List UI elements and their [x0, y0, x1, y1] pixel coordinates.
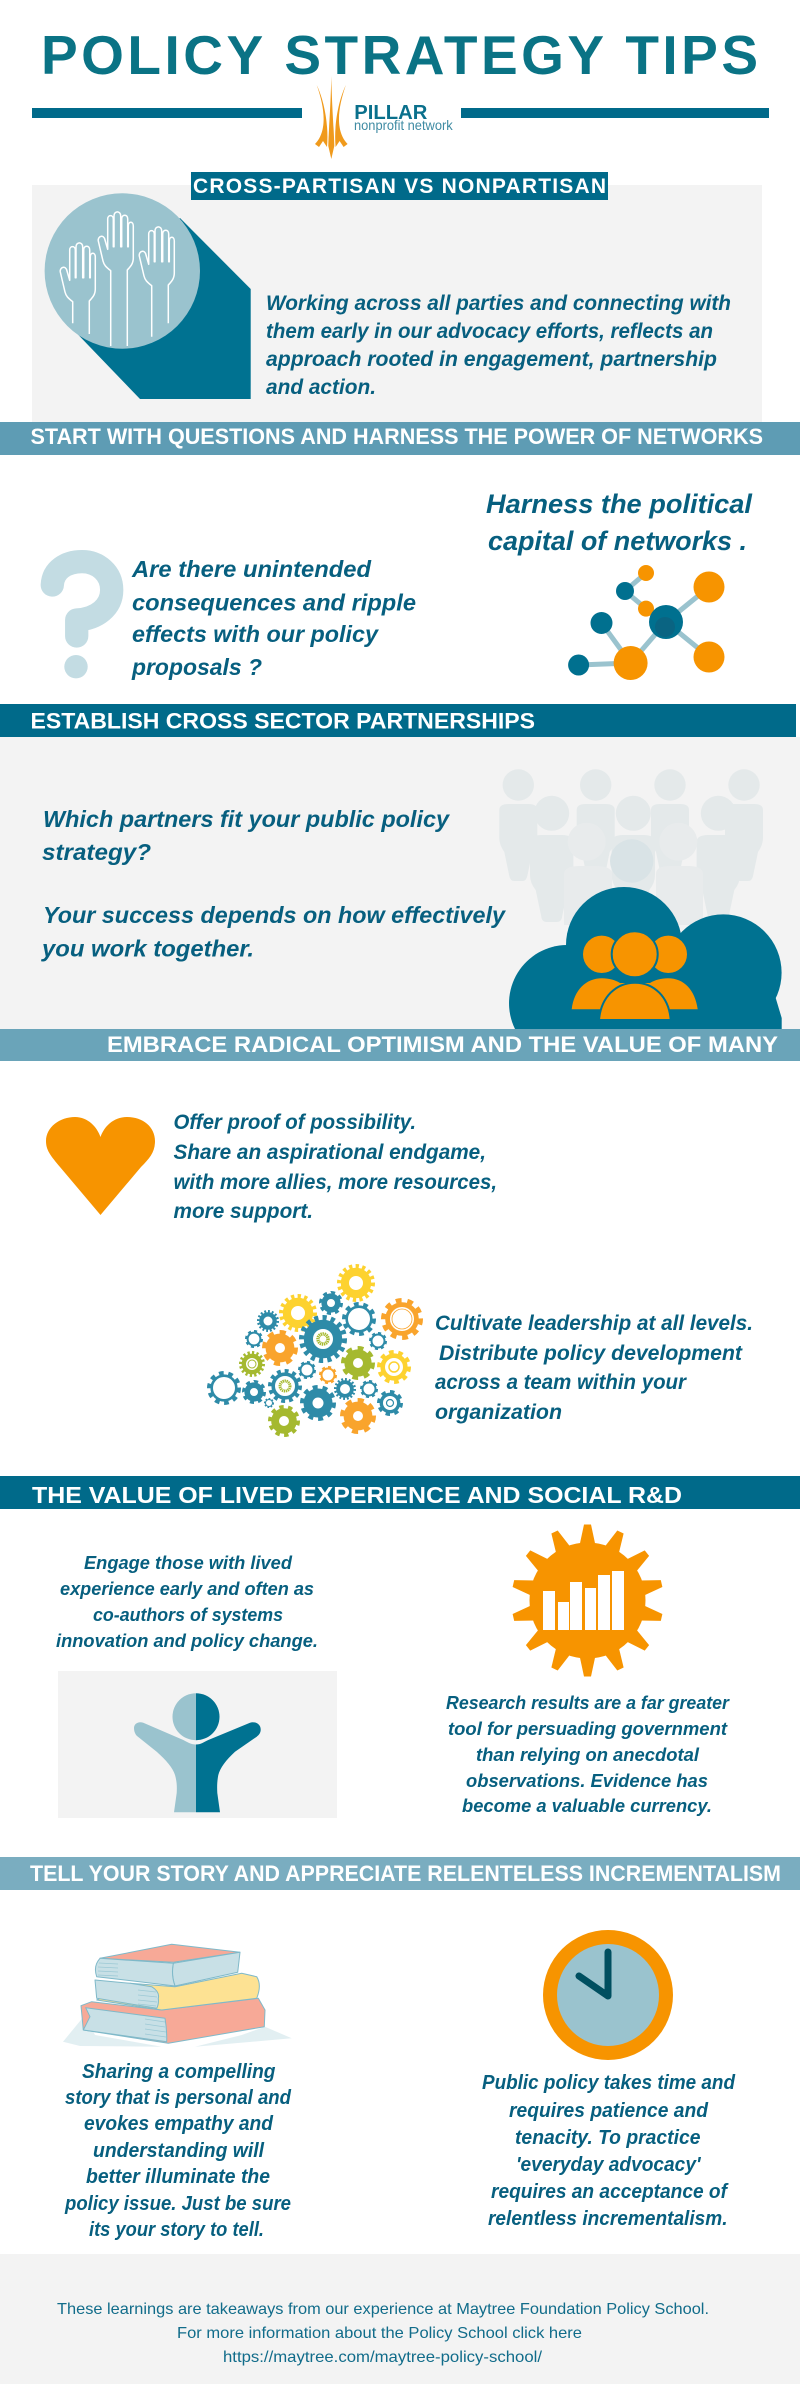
text: partners: [41, 806, 507, 962]
text: harness political capital: Harness the political: [486, 489, 752, 519]
text: unintended consequences: [131, 556, 416, 680]
section bar: cross sector partnerships: ESTABLISH CROSS SECTOR PARTNERSHIPS: [30, 708, 535, 733]
text: research results: become a valuable currency.: [462, 1795, 712, 1816]
text: harness political capital: [486, 489, 752, 556]
section bar: lived experience: THE VALUE OF LIVED EXPERIENCE AND SOCIAL R&D: [32, 1482, 682, 1508]
text: footer note: https://maytree.com/maytree-policy-school/: [223, 2349, 543, 2366]
text: research results: [446, 1692, 731, 1816]
text: proof of possibility: Offer proof of possibility.: [174, 1111, 416, 1134]
logo wordmark: nonprofit network: [354, 117, 454, 133]
logo flame: [315, 76, 348, 159]
text: partners: strategy?: [42, 839, 151, 865]
text: engage lived experience: co-authors of systems: [93, 1604, 283, 1625]
text: compelling story: story that is personal and: [65, 2087, 292, 2109]
text: cultivate leadership: organization: [435, 1401, 562, 1424]
text: proof of possibility: Share an aspirational endgame,: [174, 1141, 486, 1164]
section bar: cross sector partnerships: [0, 704, 796, 737]
text: unintended consequences: Are there unintended: [131, 556, 372, 582]
text: compelling story: policy issue. Just be sure: [64, 2193, 291, 2215]
text: cross-partisan body: and action.: [266, 376, 376, 399]
text: research results: tool for persuading government: [448, 1718, 728, 1739]
text: footer note: [57, 2301, 709, 2366]
text: footer note: These learnings are takeaways from our experience at Maytree Foundation Policy School.: [57, 2301, 709, 2318]
text: research results: than relying on anecdotal: [476, 1744, 700, 1765]
text: engage lived experience: experience early and often as: [60, 1578, 314, 1599]
text: compelling story: Sharing a compelling: [82, 2061, 276, 2083]
section bar: radical optimism: [0, 1029, 800, 1061]
icon: gear with bar chart: [512, 1524, 663, 1676]
text: partners: Which partners fit your public policy: [43, 806, 451, 832]
text: cross-partisan body: Working across all parties and connecting with: [266, 292, 731, 315]
text: research results: observations. Evidence has: [466, 1770, 708, 1791]
icon: clock: [543, 1930, 673, 2060]
text: unintended consequences: effects with our policy: [132, 621, 379, 647]
text: cross-partisan body: approach rooted in engagement, partnership: [266, 348, 717, 371]
section bar: lived experience: [0, 1476, 800, 1509]
text: cross-partisan body: [266, 292, 731, 399]
text: proof of possibility: [174, 1111, 497, 1223]
icon: raised hands: [45, 193, 251, 399]
text: compelling story: understanding will: [93, 2140, 264, 2162]
icon: two-tone person on grey panel: [58, 1671, 337, 1818]
text: public policy takes time: tenacity. To practice: [515, 2127, 700, 2149]
panel: cross sector partnerships: [0, 704, 800, 1031]
text: harness political capital: capital of networks .: [488, 526, 747, 556]
text: public policy takes time: 'everyday advocacy': [516, 2154, 702, 2176]
text: cross-partisan body: them early in our advocacy efforts, reflects an: [266, 320, 713, 343]
section bar: questions and networks: START WITH QUESTIONS AND HARNESS THE POWER OF NETWORKS: [30, 424, 763, 449]
panel: cross-partisan vs nonpartisan: [32, 172, 762, 422]
text: engage lived experience: innovation and policy change.: [56, 1630, 318, 1651]
text: cultivate leadership: [435, 1312, 753, 1424]
text: public policy takes time: Public policy takes time and: [482, 2072, 736, 2094]
icon: stack of books: [63, 1944, 292, 2047]
title rules and logo: [32, 76, 769, 159]
text: public policy takes time: relentless incrementalism.: [488, 2208, 728, 2230]
text: compelling story: evokes empathy and: [84, 2113, 274, 2135]
section bar: tell your story: TELL YOUR STORY AND APPRECIATE RELENTELESS INCREMENTALISM: [30, 1861, 781, 1886]
text: proof of possibility: with more allies, more resources,: [174, 1171, 497, 1194]
text: unintended consequences: proposals ?: [131, 654, 262, 680]
text: footer note: For more information about the Policy School click here: [177, 2325, 582, 2342]
icon: question mark: [52, 562, 112, 678]
section bar: radical optimism: EMBRACE RADICAL OPTIMISM AND THE VALUE OF MANY: [107, 1032, 778, 1057]
text: unintended consequences: consequences and ripple: [132, 590, 416, 616]
text: public policy takes time: [482, 2072, 736, 2230]
text: partners: Your success depends on how effectively: [43, 902, 507, 928]
text: proof of possibility: more support.: [174, 1200, 313, 1223]
text: compelling story: [64, 2061, 292, 2241]
text: engage lived experience: Engage those with lived: [84, 1552, 293, 1573]
text: engage lived experience: [56, 1552, 318, 1651]
text: research results: Research results are a far greater: [446, 1692, 731, 1713]
text: compelling story: its your story to tell.: [89, 2219, 264, 2241]
text: partners: you work together.: [41, 936, 254, 962]
icon: faded crowd: [499, 769, 763, 925]
icon: teal cloud with orange people: [509, 887, 782, 1031]
text: compelling story: better illuminate the: [86, 2166, 270, 2188]
logo wordmark: PILLAR: [354, 102, 428, 124]
text: cultivate leadership: across a team within your: [435, 1371, 688, 1394]
heading: cross-partisan: CROSS-PARTISAN VS NONPARTISAN: [193, 175, 606, 198]
icon: network diagram: [568, 565, 724, 680]
text: public policy takes time: requires patience and: [509, 2100, 709, 2122]
text: cultivate leadership: Distribute policy development: [439, 1342, 743, 1365]
title: POLICY STRATEGY TIPS: [41, 24, 758, 86]
text: public policy takes time: requires an acceptance of: [491, 2181, 729, 2203]
icon: heart: [46, 1117, 155, 1215]
text: cultivate leadership: Cultivate leadership at all levels.: [435, 1312, 753, 1335]
icon: cluster of gears: [209, 1266, 420, 1435]
logo wordmark: [354, 102, 454, 133]
panel: footer: [0, 2254, 800, 2384]
